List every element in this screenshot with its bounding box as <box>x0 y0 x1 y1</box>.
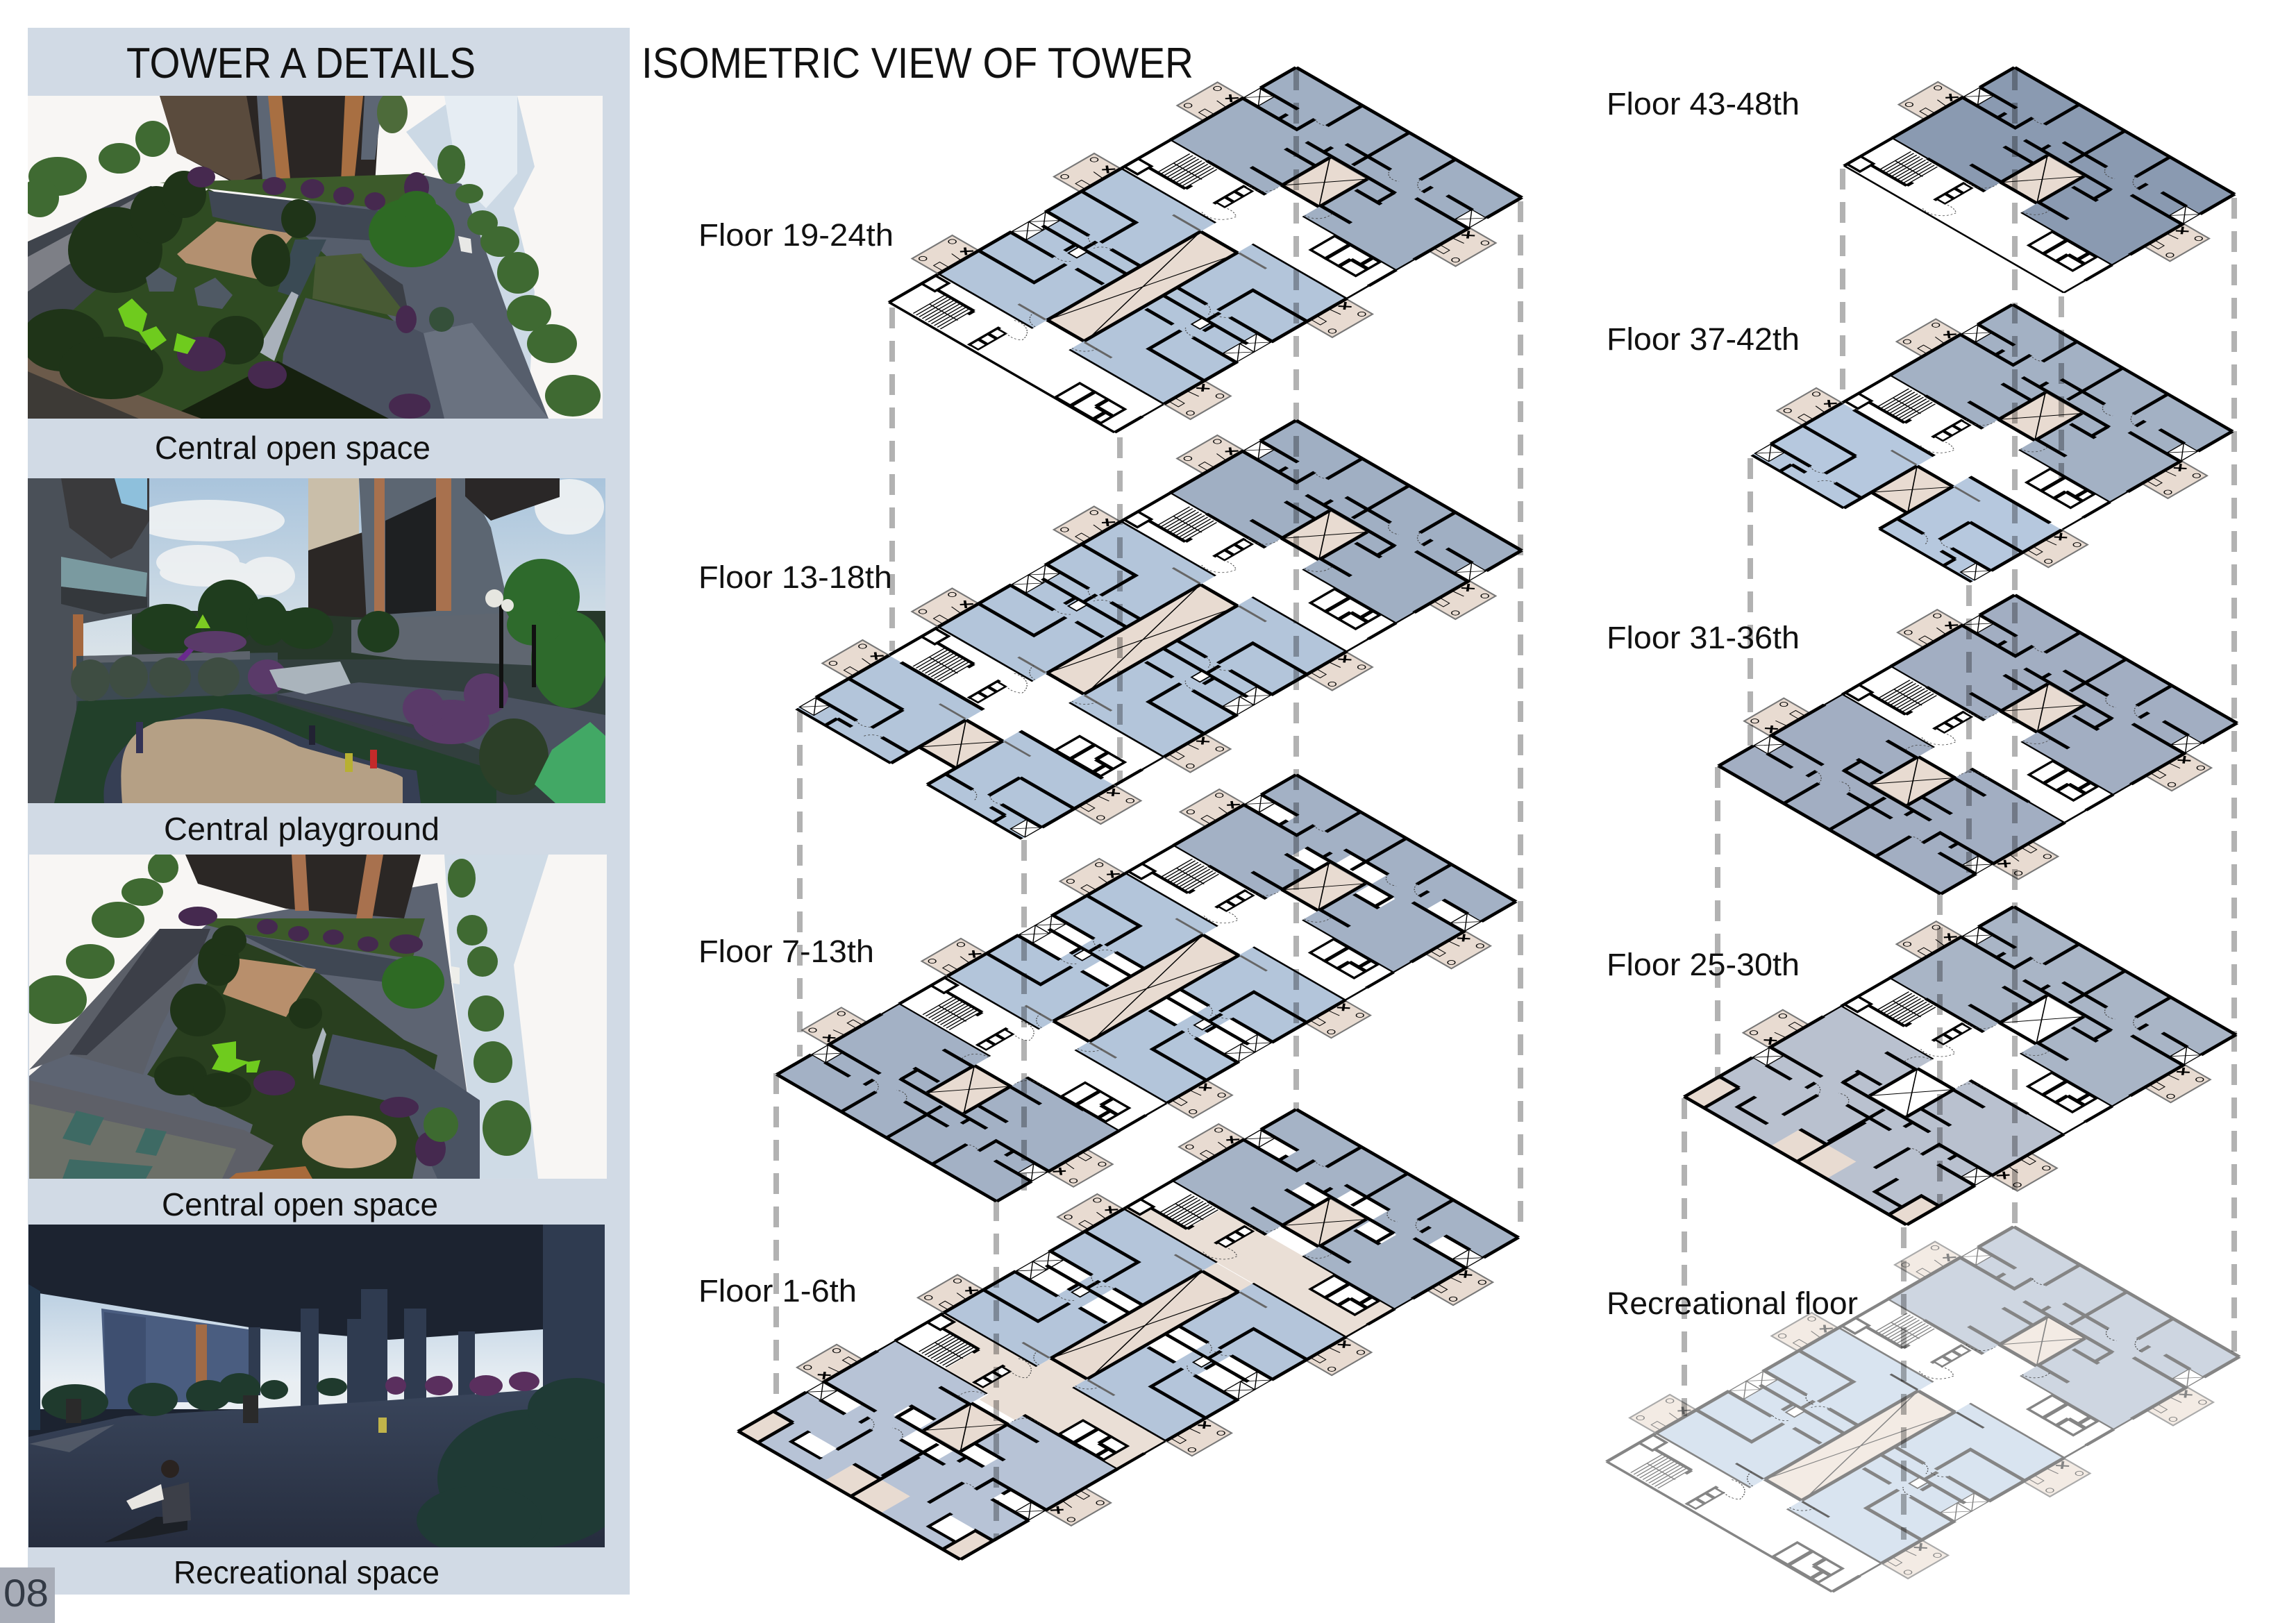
floor plate: floor 1-6th <box>712 1094 1544 1574</box>
left panel: tower A details <box>20 28 632 1595</box>
floor plate: floor 7-13th <box>751 760 1541 1216</box>
floor plate: floor 19-24th <box>863 52 1548 448</box>
label: floor 13-18th: Floor 13-18th <box>698 560 892 595</box>
dashed vertical alignment lines <box>776 69 2234 1540</box>
photo: central open space wide aerial <box>24 852 607 1179</box>
photo: central playground <box>28 478 607 803</box>
floor plate: floor 31-36th <box>1693 580 2263 909</box>
label: floor 43-48th: Floor 43-48th <box>1607 86 1800 121</box>
caption: recreational space: Recreational space <box>174 1554 439 1590</box>
floor plate: recreational floor <box>1580 1211 2265 1607</box>
heading: tower A details: TOWER A DETAILS <box>126 40 476 87</box>
label: floor 37-42th: Floor 37-42th <box>1607 321 1800 357</box>
label: floor 7-13th: Floor 7-13th <box>698 934 874 969</box>
label: floor 1-6th: Floor 1-6th <box>698 1273 857 1309</box>
photo: recreational space <box>28 1225 632 1555</box>
page number badge <box>0 1567 55 1623</box>
label: floor 19-24th: Floor 19-24th <box>698 217 894 253</box>
photo: central open space aerial <box>20 92 603 419</box>
label: recreational floor: Recreational floor <box>1607 1286 1858 1321</box>
caption: central playground: Central playground <box>164 811 439 847</box>
page number badge: 08 <box>3 1571 49 1615</box>
label: floor 31-36th: Floor 31-36th <box>1607 620 1800 655</box>
heading: isometric view of tower: ISOMETRIC VIEW OF TOWER <box>642 40 1193 87</box>
label: floor 25-30th: Floor 25-30th <box>1607 947 1800 982</box>
floor plate: floor 25-30th <box>1659 891 2262 1240</box>
floor plate: floor 43-48th <box>1818 53 2260 308</box>
caption: central open space second: Central open space <box>162 1186 438 1222</box>
floor plate: floor 13-18th <box>770 405 1548 854</box>
caption: central open space: Central open space <box>155 430 430 466</box>
floor plate: floor 37-42th <box>1726 289 2258 597</box>
